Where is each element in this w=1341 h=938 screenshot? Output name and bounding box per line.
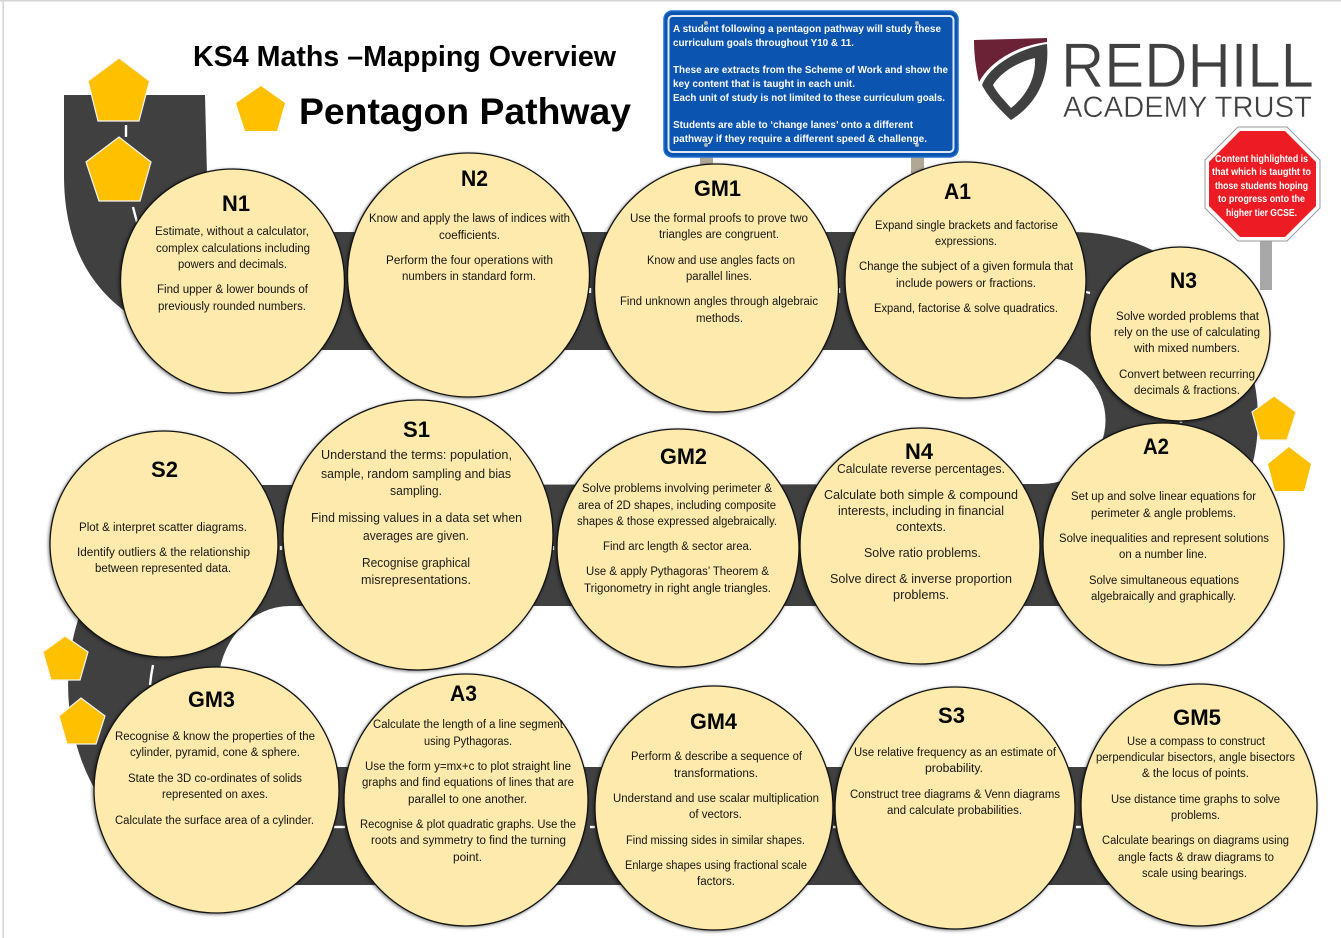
- S3 text: probability.: [925, 763, 983, 775]
- GM5 text: [1096, 736, 1295, 880]
- A2 text: Solve simultaneous equations: [1089, 575, 1239, 587]
- subtitle: Pentagon Pathway: [299, 91, 631, 132]
- unit S1: [283, 400, 553, 670]
- A3 text: point.: [453, 852, 482, 864]
- GM1 text: Find unknown angles through algebraic: [620, 296, 818, 308]
- A3 text: Calculate the length of a line segment: [373, 719, 564, 731]
- unit N1: [120, 169, 344, 393]
- unit S2: S2: [151, 457, 178, 482]
- N2 text: Know and apply the laws of indices with: [369, 213, 570, 225]
- N2 text: Perform the four operations with: [386, 255, 553, 267]
- road centre-line dashes: [126, 125, 1181, 827]
- sign text: curriculum goals throughout Y10 & 11.: [673, 38, 854, 49]
- sign text: Students are able to ‘change lanes’ onto a different: [673, 120, 914, 131]
- title pentagon icon: [236, 86, 285, 131]
- GM2 text: Find arc length & sector area.: [603, 541, 752, 553]
- A3 text: parallel to one another.: [408, 794, 527, 806]
- GM5 text: scale using bearings.: [1142, 868, 1247, 880]
- unit N4: N4: [905, 439, 934, 464]
- winding road: [64, 95, 1258, 885]
- sign text: pathway if they require a different speed & challenge.: [673, 134, 927, 145]
- N1 text: [155, 226, 310, 313]
- GM5 text: angle facts & draw diagrams to: [1118, 852, 1274, 864]
- GM5 text: Use a compass to construct: [1127, 736, 1266, 748]
- GM1 text: methods.: [696, 313, 743, 325]
- pentagon right 2: [1268, 447, 1311, 491]
- N2 text: numbers in standard form.: [402, 271, 536, 283]
- S1 text: sample, random sampling and bias: [321, 466, 511, 481]
- S2 text: between represented data.: [95, 563, 231, 575]
- unit GM3: GM3: [188, 687, 235, 712]
- GM5 text: perpendicular bisectors, angle bisectors: [1096, 752, 1295, 764]
- A2 text: on a number line.: [1119, 549, 1207, 561]
- GM4 text: Find missing sides in similar shapes.: [626, 835, 805, 847]
- unit GM5: GM5: [1173, 705, 1221, 730]
- stop sign text: those students hoping: [1215, 181, 1308, 192]
- unit A2: A2: [1143, 434, 1169, 459]
- N4 text: Calculate both simple & compound: [824, 487, 1018, 502]
- S1 text: Find missing values in a data set when: [311, 510, 522, 525]
- A3 text: Use the form y=mx+c to plot straight line: [365, 761, 571, 773]
- N3 text: Solve worded problems that: [1116, 311, 1260, 323]
- GM2 text: Trigonometry in right angle triangles.: [584, 583, 771, 595]
- logo: Redhill Academy Trust: [974, 31, 1314, 124]
- N2 text: coefficients.: [439, 230, 500, 242]
- unit A3: [344, 674, 588, 926]
- A2 text: [1059, 491, 1269, 603]
- unit A3: A3: [450, 681, 477, 706]
- S3 text: Construct tree diagrams & Venn diagrams: [850, 789, 1060, 801]
- GM3 text: State the 3D co-ordinates of solids: [128, 773, 302, 785]
- pentagon on road 1: [88, 58, 150, 121]
- pentagon right 1: [1252, 396, 1296, 440]
- GM4 text: of vectors.: [689, 809, 742, 821]
- unit GM4: [595, 686, 833, 930]
- GM1 text: Know and use angles facts on: [647, 255, 795, 267]
- S3 text: Use relative frequency as an estimate of: [854, 747, 1057, 759]
- pentagon left 1: [43, 636, 88, 680]
- N4 text: Calculate reverse percentages.: [837, 461, 1005, 476]
- GM1 text: triangles are congruent.: [659, 229, 779, 241]
- A2 text: Set up and solve linear equations for: [1071, 491, 1256, 503]
- stop sign text: to progress onto the: [1218, 194, 1305, 205]
- unit GM2: GM2: [660, 444, 707, 469]
- unit N2: [348, 153, 590, 397]
- N3 text: rely on the use of calculating: [1114, 327, 1260, 339]
- unit S3: [835, 687, 1075, 929]
- GM5 text: problems.: [1171, 810, 1220, 822]
- GM4 text: transformations.: [674, 768, 758, 780]
- S1 text: Recognise graphical: [362, 555, 470, 570]
- unit S2: [50, 431, 278, 657]
- N4 text: Solve ratio problems.: [864, 545, 981, 560]
- A1 text: Change the subject of a given formula that: [859, 261, 1074, 273]
- title: KS4 Maths –Mapping Overview: [193, 41, 616, 73]
- N4 text: contexts.: [896, 519, 946, 534]
- stop sign text: higher tier GCSE.: [1226, 208, 1297, 219]
- N4 text: interests, including in financial: [838, 503, 1004, 518]
- unit GM3: [94, 667, 339, 913]
- unit S1: S1: [403, 417, 430, 442]
- unit N2: N2: [461, 166, 488, 191]
- N3 text: decimals & fractions.: [1134, 385, 1240, 397]
- GM5 text: & the locus of points.: [1142, 768, 1249, 780]
- GM1 text: [620, 213, 818, 325]
- N4 text: problems.: [893, 587, 949, 602]
- S1 text: [311, 447, 522, 587]
- A1 text: expressions.: [935, 236, 997, 248]
- GM2 text: [577, 483, 777, 595]
- A3 text: [360, 719, 576, 864]
- GM3 text: Calculate the surface area of a cylinder.: [115, 815, 314, 827]
- S3 text: and calculate probabilities.: [887, 805, 1022, 817]
- GM2 text: Use & apply Pythagoras’ Theorem &: [586, 566, 769, 578]
- GM4 text: Perform & describe a sequence of: [631, 751, 803, 763]
- GM4 text: Enlarge shapes using fractional scale: [625, 860, 807, 872]
- A2 text: Solve inequalities and represent solutions: [1059, 533, 1269, 545]
- unit N3: N3: [1170, 268, 1197, 293]
- GM4 text: [613, 751, 819, 888]
- pentagon left 2: [59, 698, 105, 744]
- GM3 text: cylinder, pyramid, cone & sphere.: [130, 747, 300, 759]
- S1 text: averages are given.: [363, 528, 469, 543]
- logo wordmark: ACADEMY TRUST: [1063, 91, 1312, 124]
- A1 text: Expand single brackets and factorise: [875, 220, 1058, 232]
- GM4 text: Understand and use scalar multiplication: [613, 793, 819, 805]
- A3 text: using Pythagoras.: [424, 736, 512, 748]
- A3 text: graphs and find equations of lines that are: [362, 777, 574, 789]
- GM5 text: Use distance time graphs to solve: [1111, 794, 1280, 806]
- S1 text: misrepresentations.: [361, 572, 471, 587]
- unit A1: [845, 162, 1086, 398]
- GM4 text: factors.: [697, 876, 735, 888]
- A1 text: [859, 220, 1074, 315]
- unit GM2: [557, 429, 799, 667]
- S1 text: sampling.: [390, 483, 442, 498]
- N1 text: complex calculations including: [156, 243, 310, 255]
- N3 text: with mixed numbers.: [1133, 343, 1240, 355]
- logo wordmark: REDHILL: [1061, 31, 1314, 101]
- S2 text: Identify outliers & the relationship: [77, 547, 250, 559]
- GM2 text: shapes & those expressed algebraically.: [577, 516, 777, 528]
- unit S3: S3: [938, 703, 965, 728]
- unit GM1: GM1: [694, 176, 741, 201]
- A1 text: Expand, factorise & solve quadratics.: [874, 303, 1058, 315]
- N1 text: Estimate, without a calculator,: [155, 226, 309, 238]
- GM2 text: area of 2D shapes, including composite: [578, 500, 776, 512]
- sign text: These are extracts from the Scheme of Work and show the: [673, 65, 948, 76]
- unit GM5: [1081, 684, 1317, 926]
- stop sign text: that which is taugtht to: [1212, 167, 1311, 178]
- unit N1: N1: [222, 191, 250, 216]
- unit GM1: [594, 164, 838, 412]
- unit N3: [1090, 247, 1270, 421]
- N3 text: Convert between recurring: [1119, 369, 1255, 381]
- N3 text: [1114, 311, 1260, 397]
- A2 text: algebraically and graphically.: [1091, 591, 1236, 603]
- A3 text: Recognise & plot quadratic graphs. Use the: [360, 819, 576, 831]
- GM2 text: Solve problems involving perimeter &: [582, 483, 772, 495]
- N2 text: [369, 213, 570, 283]
- S2 text: [77, 522, 250, 575]
- A2 text: perimeter & angle problems.: [1091, 508, 1236, 520]
- N1 text: previously rounded numbers.: [158, 301, 306, 313]
- N1 text: powers and decimals.: [178, 259, 287, 271]
- N1 text: Find upper & lower bounds of: [157, 284, 309, 296]
- stop sign text: [1212, 154, 1311, 219]
- GM3 text: [115, 731, 315, 827]
- GM1 text: parallel lines.: [686, 271, 752, 283]
- unit N4: [800, 428, 1040, 664]
- sign posts: [700, 155, 924, 177]
- sign text: Each unit of study is not limited to these curriculum goals.: [673, 93, 945, 104]
- sign text: [673, 24, 948, 145]
- pentagon on road 2: [86, 137, 151, 201]
- N4 text: [824, 461, 1018, 602]
- blue information sign: [664, 11, 958, 157]
- GM1 text: Use the formal proofs to prove two: [630, 213, 808, 225]
- logo shield: [974, 38, 1047, 120]
- N4 text: Solve direct & inverse proportion: [830, 571, 1012, 586]
- unit GM4: GM4: [690, 709, 738, 734]
- S3 text: [850, 747, 1060, 817]
- GM3 text: Recognise & know the properties of the: [115, 731, 315, 743]
- unit A2: [1043, 423, 1284, 665]
- S2 text: Plot & interpret scatter diagrams.: [79, 522, 247, 534]
- stop sign: [1205, 127, 1320, 241]
- sign text: A student following a pentagon pathway will study these: [673, 24, 941, 35]
- GM5 text: Calculate bearings on diagrams using: [1102, 835, 1289, 847]
- S1 text: Understand the terms: population,: [321, 447, 512, 462]
- A1 text: include powers or fractions.: [896, 278, 1036, 290]
- sign text: key content that is taught in each unit.: [673, 79, 855, 90]
- stop sign text: Content highlighted is: [1215, 154, 1308, 165]
- A3 text: roots and symmetry to find the turning: [371, 835, 566, 847]
- unit A1: A1: [944, 179, 971, 204]
- stop sign post: [1260, 241, 1272, 290]
- GM3 text: represented on axes.: [162, 789, 268, 801]
